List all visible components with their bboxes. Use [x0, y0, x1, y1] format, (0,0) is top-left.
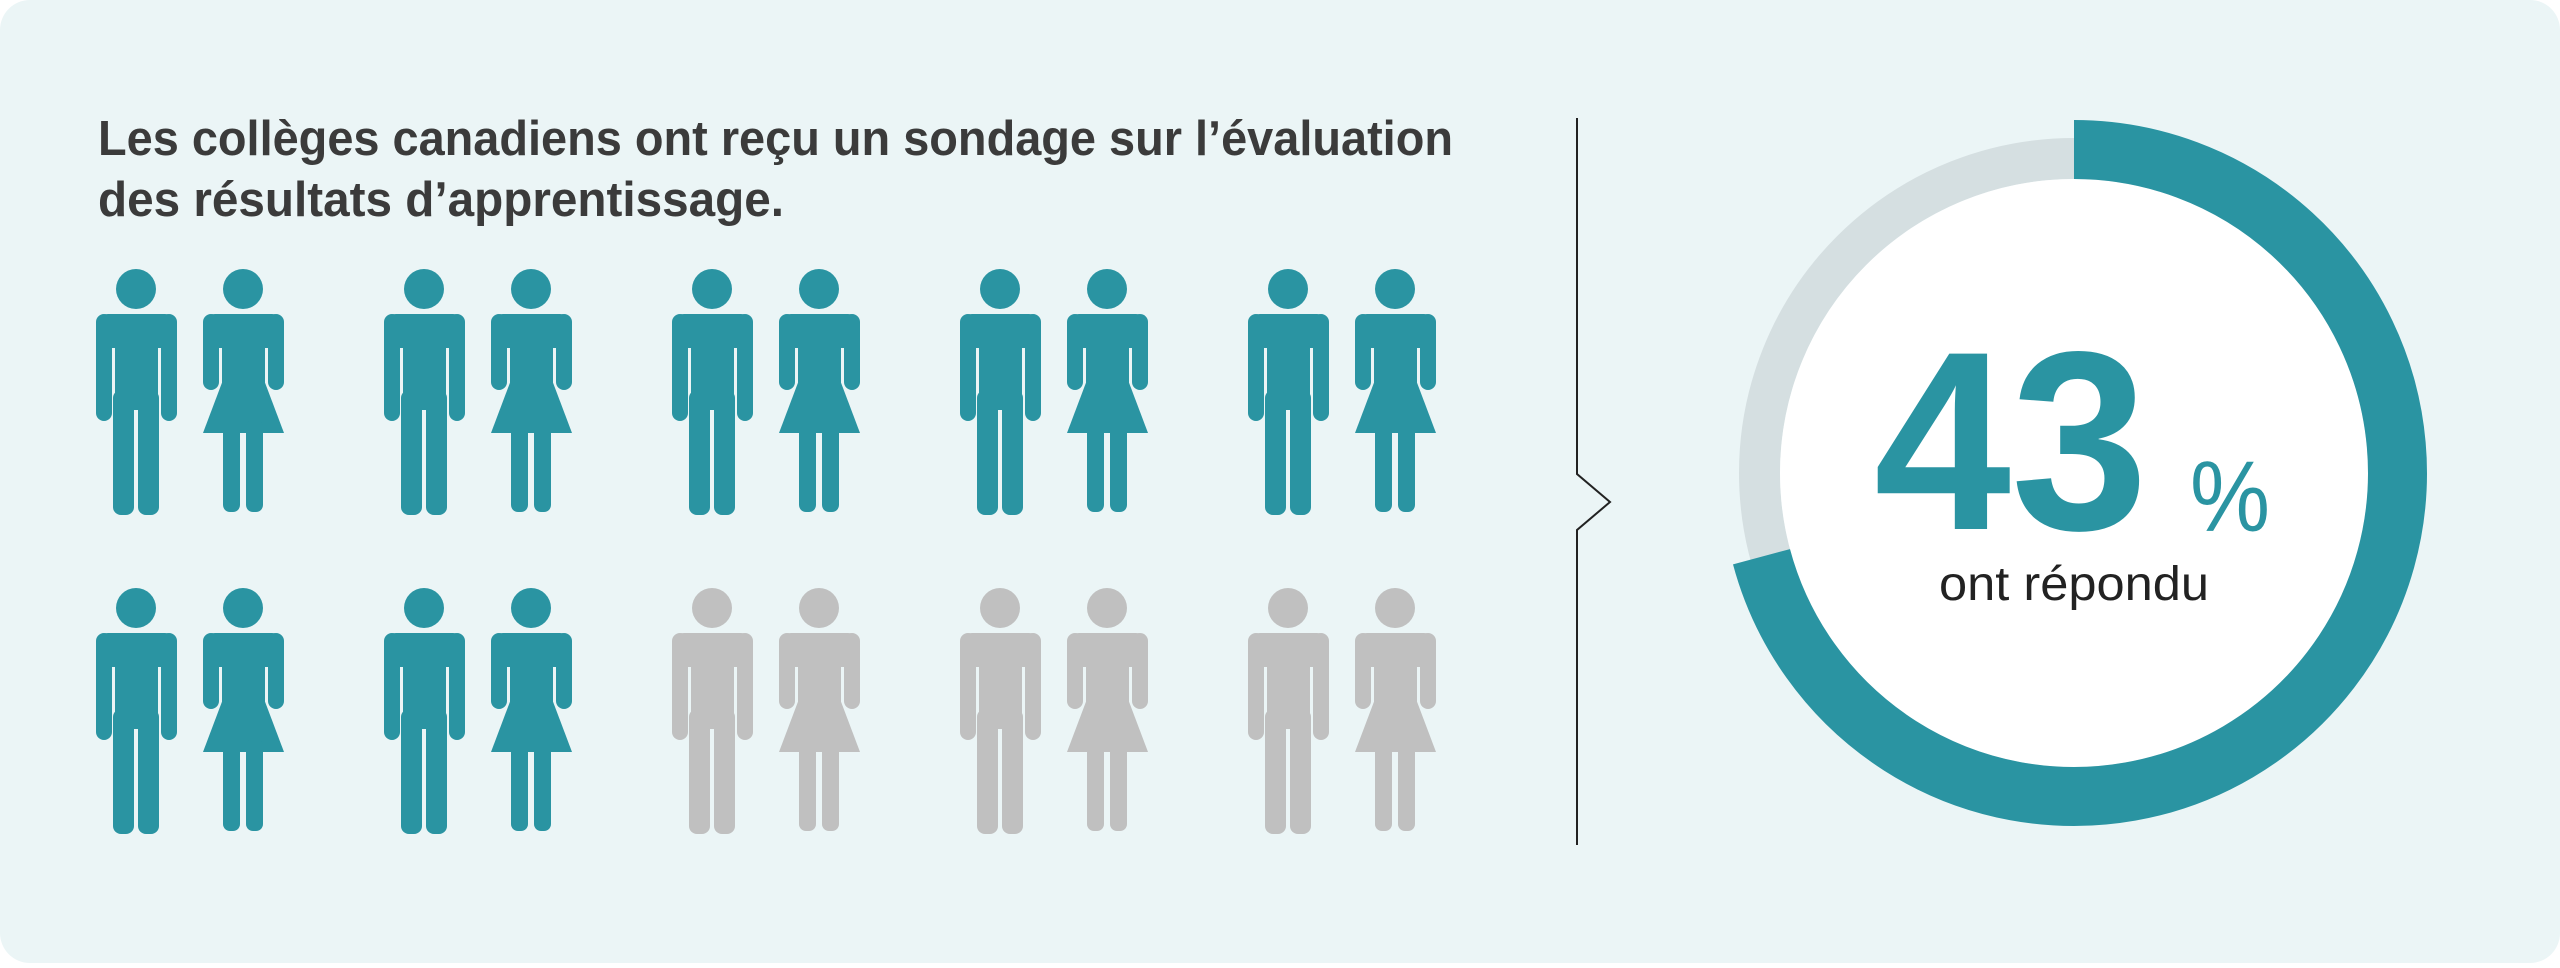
- row 1: teal pairs: [96, 269, 1436, 515]
- pictogram grid: people: [96, 269, 1436, 834]
- row 2: teal pairs: [96, 588, 572, 834]
- row 2: grey pairs: [672, 588, 1436, 834]
- title: Les collèges canadiens ont reçu un sondage sur l’évaluation: [98, 112, 1453, 166]
- label: ont répondu: [1939, 558, 2209, 611]
- stat: 43%: 43: [1874, 299, 2148, 584]
- title: [98, 112, 1453, 227]
- title: des résultats d’apprentissage.: [98, 173, 784, 227]
- stat: 43%: %: [2190, 441, 2270, 553]
- donut chart: [1760, 150, 2397, 796]
- divider arrow: [1577, 118, 1610, 845]
